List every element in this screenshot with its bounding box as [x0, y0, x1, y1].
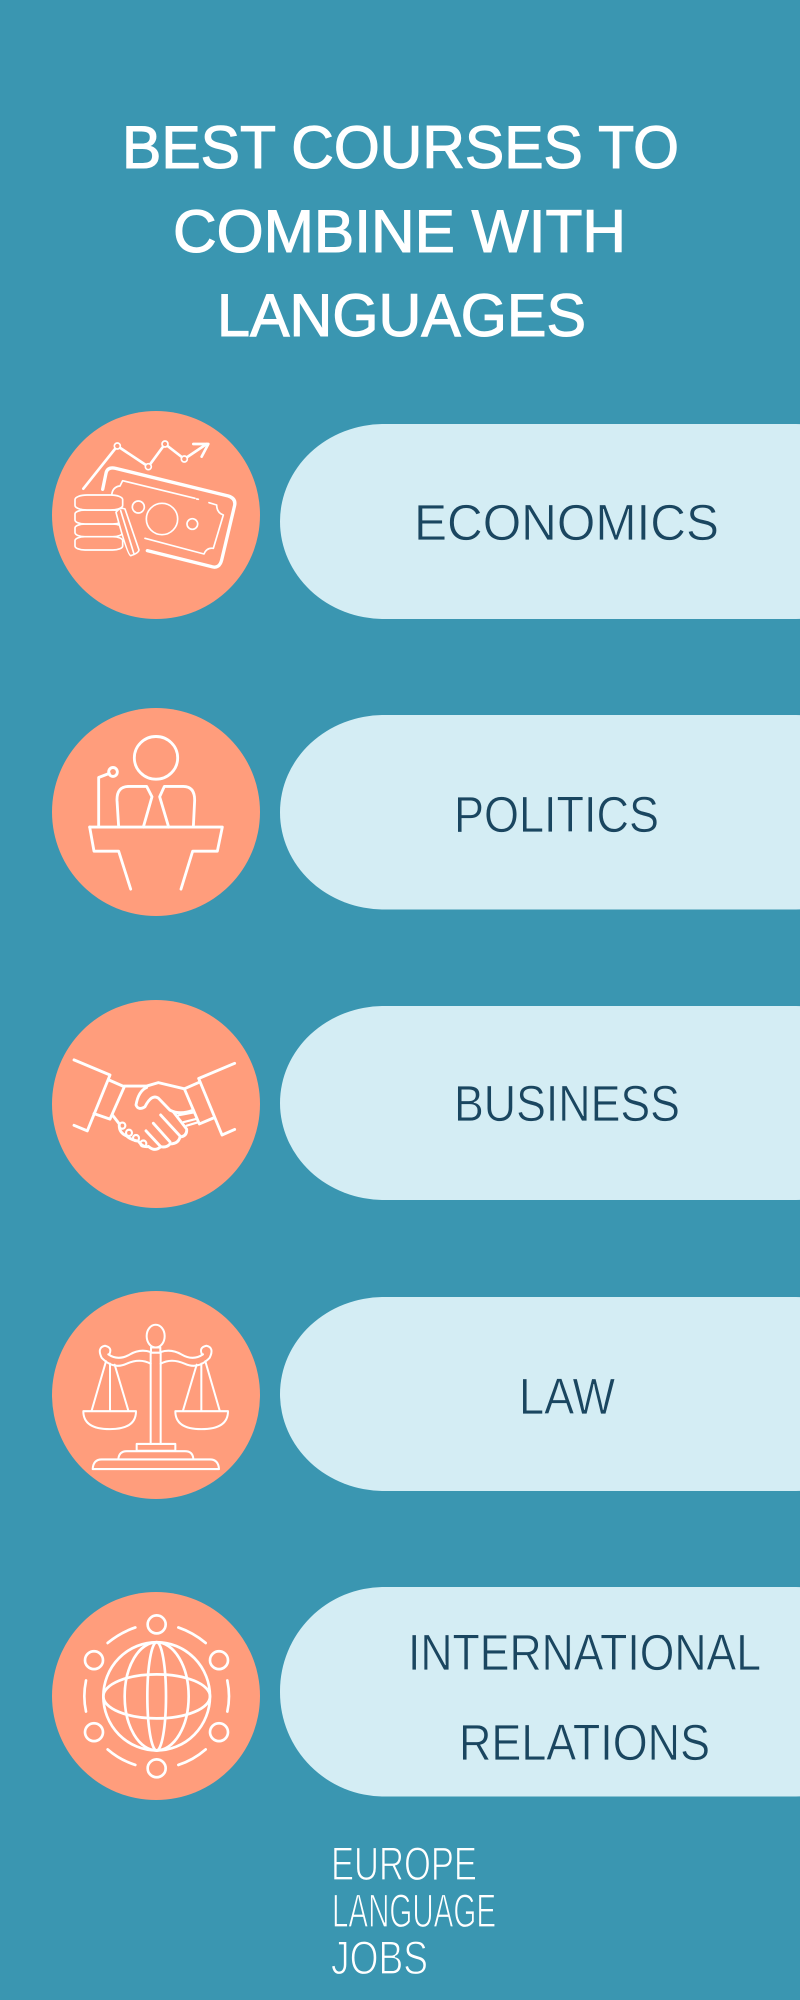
pill: economics	[280, 424, 800, 619]
circle: politics	[52, 708, 260, 916]
pill: politics	[280, 715, 800, 910]
panel: business	[52, 1000, 800, 1208]
icon: speaker at podium	[90, 736, 222, 889]
panel: law	[52, 1291, 800, 1499]
title: LANGUAGES	[217, 282, 586, 349]
icon: money and rising chart	[75, 441, 235, 567]
pill: business	[280, 1006, 800, 1200]
icon: handshake	[74, 1060, 235, 1149]
pill: international relations	[280, 1587, 800, 1796]
label: economics: ECONOMICS	[414, 494, 719, 551]
pill: law	[280, 1297, 800, 1491]
circle: law	[52, 1291, 260, 1499]
label: international relations	[408, 1624, 761, 1771]
panel: economics	[52, 411, 800, 619]
title: COMBINE WITH	[173, 198, 626, 265]
circle: international relations	[52, 1592, 260, 1800]
logo: Europe Language Jobs: LANGUAGE	[332, 1884, 496, 1937]
panel: international relations	[52, 1587, 800, 1800]
logo: Europe Language Jobs	[331, 1837, 496, 1984]
title	[122, 114, 679, 349]
icon: scales of justice	[83, 1325, 228, 1469]
icon: globe with surrounding nodes	[84, 1615, 229, 1777]
panel: politics	[52, 708, 800, 916]
label: politics: POLITICS	[454, 786, 659, 843]
circle: business	[52, 1000, 260, 1208]
label: law: LAW	[519, 1368, 615, 1425]
label: international relations: RELATIONS	[459, 1714, 710, 1771]
circle: economics	[52, 411, 260, 619]
logo: Europe Language Jobs: EUROPE	[331, 1837, 477, 1890]
label: business: BUSINESS	[454, 1075, 680, 1132]
title: BEST COURSES TO	[122, 114, 679, 181]
logo: Europe Language Jobs: JOBS	[331, 1931, 428, 1984]
